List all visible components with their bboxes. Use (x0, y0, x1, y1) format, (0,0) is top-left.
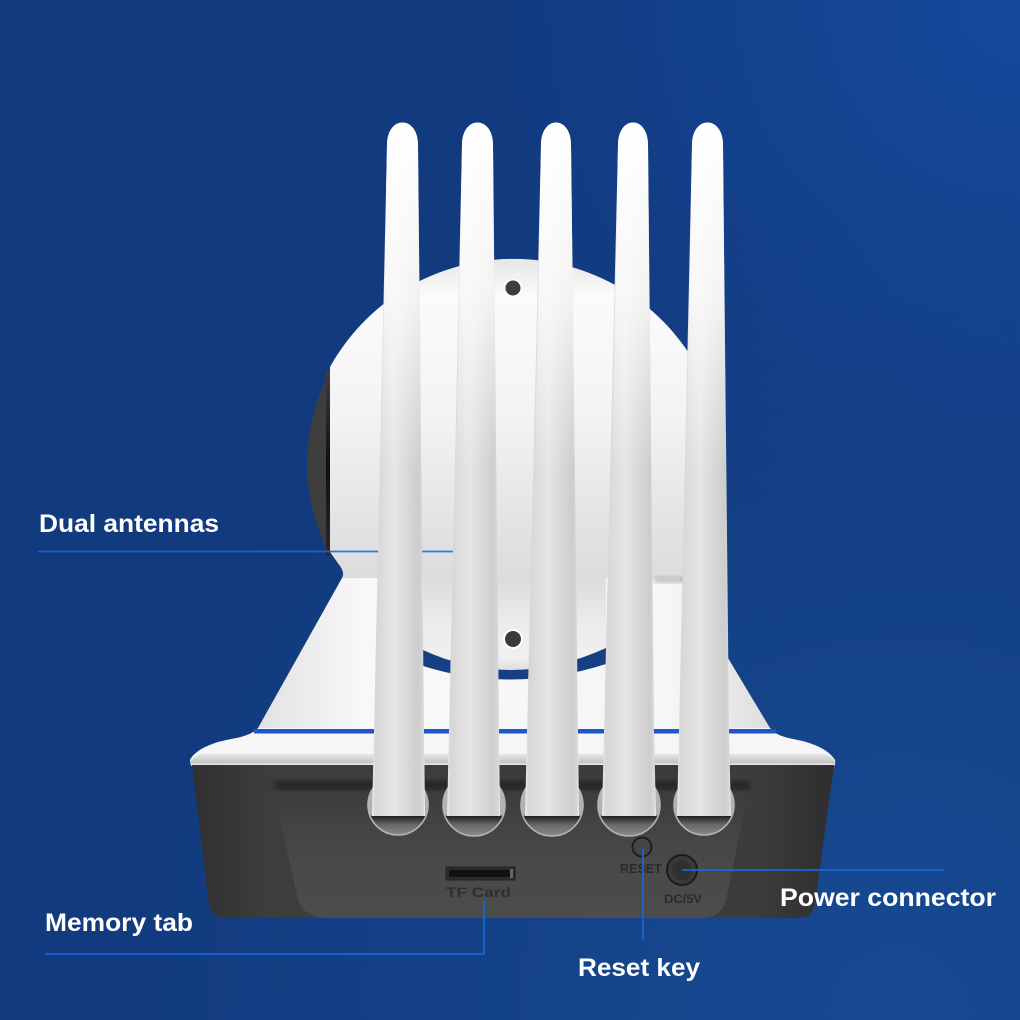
upper mount screw (504, 279, 522, 297)
base dark body (192, 765, 834, 918)
label: Reset key: Reset key (578, 954, 700, 982)
label: Power connector: Power connector (780, 884, 996, 912)
antenna 2 (447, 122, 500, 816)
base top white section (190, 728, 835, 768)
leader line: memory tab (45, 900, 484, 954)
RESET label: RESET (620, 862, 662, 876)
lower dome bowl (423, 570, 606, 670)
neck shadow on right (654, 576, 686, 583)
TF card slot (446, 867, 515, 880)
leader line: reset key (642, 849, 644, 940)
antenna 5 (677, 122, 731, 816)
TF Card label: TF Card (446, 884, 511, 900)
blue crescent under dome (423, 646, 606, 680)
antenna mount rings (368, 774, 734, 836)
antenna highlights (381, 122, 726, 470)
panel top shadow (274, 780, 750, 790)
lens dark seam (326, 372, 331, 556)
antenna 1 (372, 122, 425, 816)
label: Dual antennas: Dual antennas (39, 510, 219, 538)
DC/5V label: DC/5V (664, 894, 702, 906)
reset button (632, 838, 652, 856)
camera lens edge (307, 366, 333, 558)
DC power jack (667, 855, 697, 885)
lower mount screw (503, 629, 523, 649)
leader line: dual antennas (38, 550, 455, 552)
base blue stripe (254, 729, 776, 734)
antenna 3 (525, 122, 579, 816)
label: Memory tab: Memory tab (45, 909, 193, 937)
camera stand (258, 578, 770, 728)
antenna 4 (602, 122, 656, 816)
rear recessed panel (272, 782, 750, 918)
base rim shading (190, 754, 835, 766)
leader line: power connector (682, 869, 944, 871)
camera dome (330, 259, 692, 578)
